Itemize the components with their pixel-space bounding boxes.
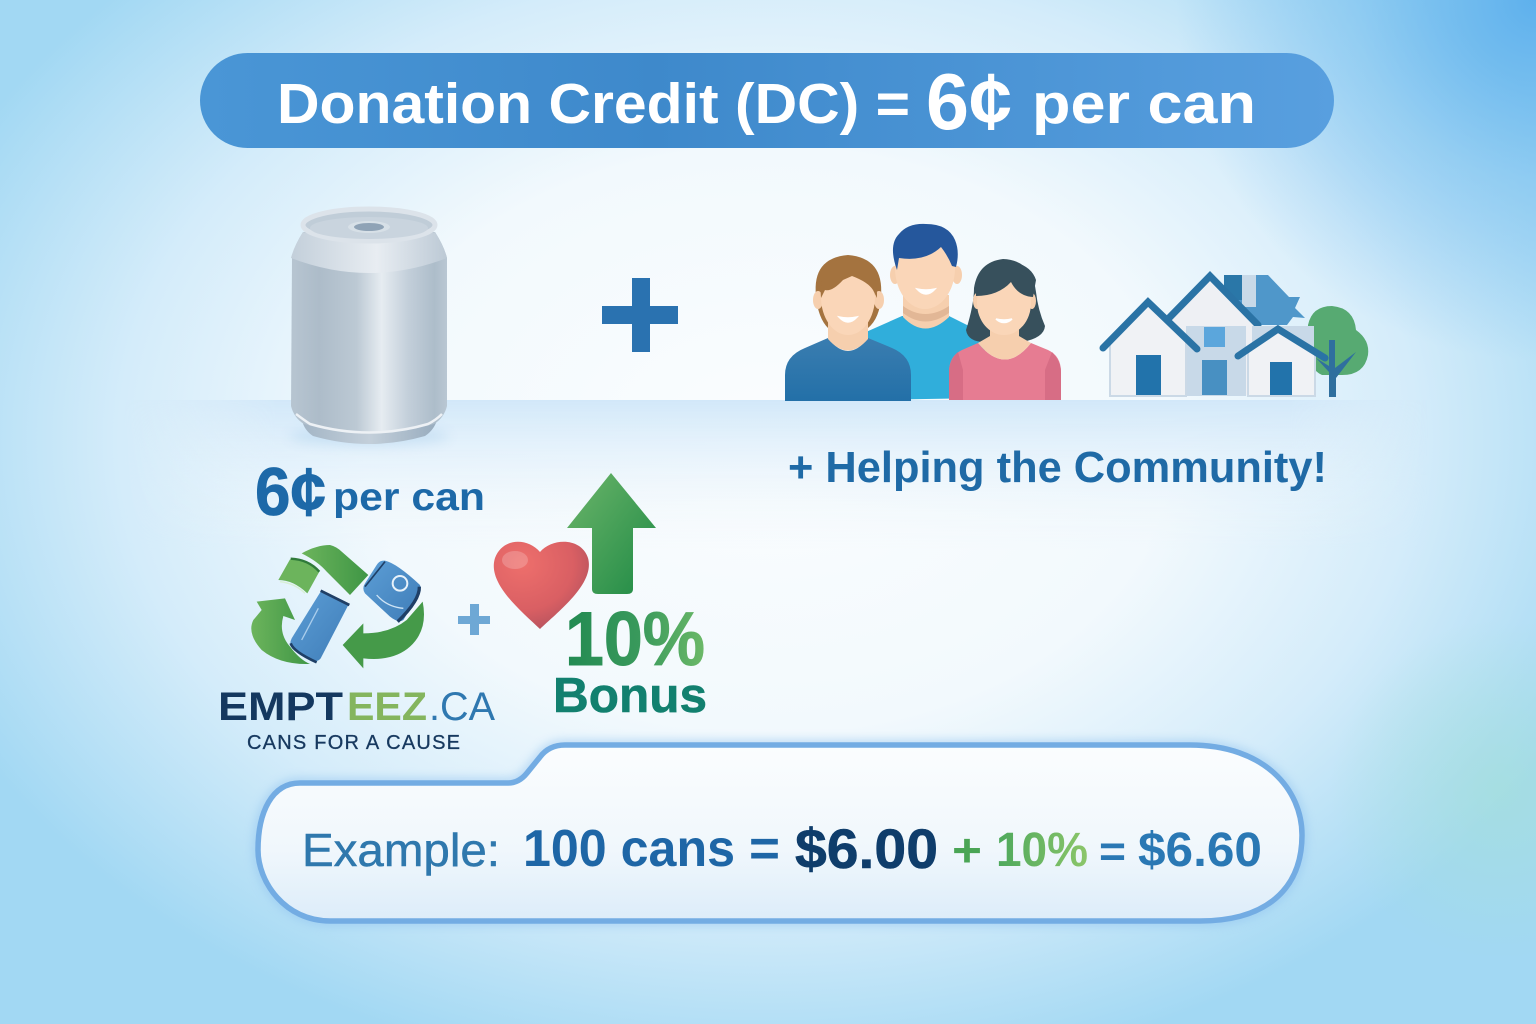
green crushed can <box>278 559 319 593</box>
text: 10 percent bonus: 10% <box>565 597 705 682</box>
woman <box>949 259 1061 400</box>
title banner: Donation Credit (DC) = <box>277 72 910 136</box>
label: 6 cents per can <box>255 454 485 530</box>
callout: worked example: + <box>952 824 982 876</box>
label: 6 cents per can: per can <box>333 476 485 519</box>
small plus <box>458 604 490 635</box>
right house <box>1248 330 1315 396</box>
logo: recycling icon with cans <box>251 545 424 668</box>
icon: heart <box>494 542 589 629</box>
logo text: Empteez.ca: .CA <box>429 685 495 729</box>
back roof shape <box>1224 275 1305 325</box>
tree trunk <box>1316 340 1356 397</box>
tree crown <box>1308 306 1368 375</box>
callout: worked example: $6.00 <box>795 817 938 880</box>
callout: worked example: 100 cans <box>523 820 735 878</box>
middle house <box>1168 276 1254 395</box>
callout: worked example: $6.60 <box>1138 824 1262 877</box>
top recycling band <box>302 545 368 595</box>
left house <box>1110 300 1186 396</box>
title banner <box>200 53 1334 148</box>
callout: worked example: = <box>1099 827 1126 876</box>
middle person <box>866 224 985 400</box>
logo text: Empteez.ca: CANS FOR A CAUSE <box>247 732 460 754</box>
callout: worked example <box>258 745 1302 921</box>
title banner: per can <box>1032 72 1256 136</box>
icon: aluminium can <box>289 209 449 445</box>
blue can standing <box>290 591 349 662</box>
right arrow <box>343 602 424 668</box>
icon: large plus <box>602 278 678 352</box>
text: 10 percent bonus <box>553 597 707 723</box>
text: helping the community: + Helping the Community! <box>788 443 1327 492</box>
icon: houses and tree <box>1103 275 1368 397</box>
blue can tilted <box>363 561 420 622</box>
callout: worked example: 10% <box>996 824 1088 877</box>
logo text: Empteez.ca <box>218 685 495 754</box>
left man <box>785 255 911 401</box>
logo text: Empteez.ca: EMPT <box>218 685 343 729</box>
icon: three people <box>785 224 1061 401</box>
label: 6 cents per can: 6¢ <box>255 454 326 530</box>
callout: worked example: Example: <box>302 824 500 876</box>
left arrow <box>251 598 310 664</box>
title banner: 6¢ <box>926 57 1012 146</box>
text: 10 percent bonus: Bonus <box>553 669 707 723</box>
icon: up arrow <box>567 473 656 594</box>
logo text: Empteez.ca: EEZ <box>347 685 427 729</box>
callout: worked example: = <box>749 820 780 878</box>
